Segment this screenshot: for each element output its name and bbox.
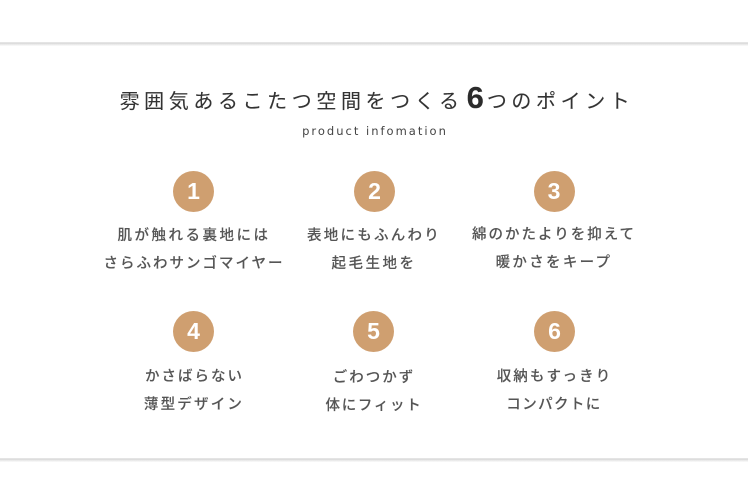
point 6 text <box>497 365 612 414</box>
point 3 text: 綿のかたよりを抑えて <box>472 223 636 244</box>
point 4 text: 薄型デザイン <box>144 393 244 414</box>
point 2 text: 表地にもふんわり <box>307 224 441 245</box>
number badge 5: 5 <box>367 318 380 344</box>
point 3 text <box>472 223 636 272</box>
number badge 4 <box>173 311 214 352</box>
number badge 5 <box>353 311 394 352</box>
number badge 2: 2 <box>368 178 381 204</box>
number badge 6: 6 <box>548 318 561 344</box>
point 6 text: 収納もすっきり <box>497 365 612 386</box>
number badge 3 <box>534 171 574 212</box>
number badge 1 <box>173 171 214 212</box>
point 6 text: コンパクトに <box>506 393 602 414</box>
number badge 4: 4 <box>187 318 200 344</box>
title: 雰囲気あるこたつ空間をつくる6つのポイント <box>120 80 634 115</box>
point 1 text <box>103 224 285 273</box>
point 3 text: 暖かさをキープ <box>496 251 612 272</box>
point 2 text: 起毛生地を <box>332 252 416 273</box>
number badge 1: 1 <box>187 178 200 204</box>
point 5 text: 体にフィット <box>326 394 422 415</box>
point 5 text: ごわつかず <box>333 366 415 387</box>
point 4 text <box>144 365 244 414</box>
point 1 text: 肌が触れる裏地には <box>118 224 270 245</box>
point 1 text: さらふわサンゴマイヤー <box>103 252 285 273</box>
number badge 3: 3 <box>548 178 560 204</box>
point 2 text <box>307 224 441 273</box>
number badge 6 <box>534 311 575 352</box>
number badge 2 <box>354 171 395 212</box>
subtitle: product infomation <box>302 124 448 138</box>
point 4 text: かさばらない <box>145 365 244 386</box>
point 5 text <box>326 366 422 415</box>
